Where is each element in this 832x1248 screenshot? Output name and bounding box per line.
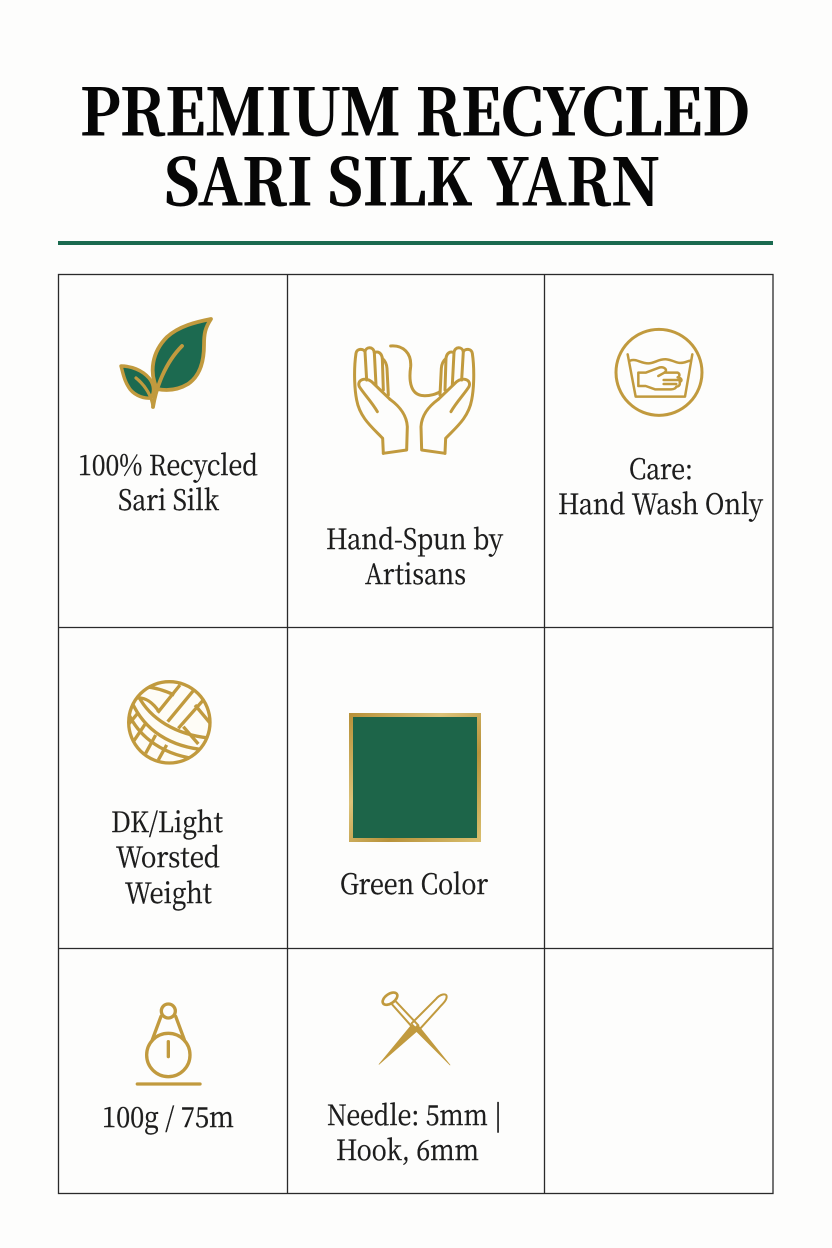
label: care: Hand Wash Only (558, 483, 763, 523)
label: needle and hook: Needle: 5mm | (327, 1094, 502, 1134)
green divider rule (58, 241, 773, 245)
label: needle and hook (327, 1094, 502, 1169)
icon: hand wash (616, 329, 702, 415)
panel: care (558, 329, 763, 523)
label: hand-spun: Hand-Spun by (326, 518, 503, 558)
title: SARI SILK YARN (164, 132, 660, 224)
label: care (558, 448, 763, 523)
label: recycled silk: Sari Silk (118, 479, 219, 519)
icon: green swatch (351, 715, 479, 840)
panel: needle and hook (327, 990, 502, 1169)
title (80, 62, 750, 224)
panel: weight and length (102, 1004, 234, 1136)
label: yarn weight: Weight (125, 872, 212, 912)
label: recycled silk (78, 444, 258, 519)
icon: scale weight (137, 1004, 200, 1084)
panel: colour (340, 715, 488, 903)
label: hand-spun: Artisans (365, 553, 466, 593)
panel: recycled silk (78, 319, 258, 519)
icon: yarn ball (127, 682, 212, 763)
label: hand-spun (326, 518, 503, 593)
label: weight and length: 100g / 75m (102, 1096, 234, 1136)
label: yarn weight (111, 801, 223, 912)
label: yarn weight: DK/Light (111, 801, 223, 841)
title: PREMIUM RECYCLED (80, 62, 750, 154)
label: needle and hook: Hook, 6mm (336, 1129, 479, 1169)
icon: crossed needles (379, 990, 450, 1065)
label: colour: Green Color (340, 863, 488, 903)
specification grid (58, 274, 773, 1194)
icon: open hands with yarn (355, 346, 474, 453)
label: recycled silk: 100% Recycled (78, 444, 258, 484)
label: care: Care: (629, 448, 693, 488)
icon: leaves (121, 319, 211, 407)
panel: hand-spun (326, 346, 503, 593)
panel: yarn weight (111, 682, 223, 912)
label: yarn weight: Worsted (116, 836, 220, 876)
